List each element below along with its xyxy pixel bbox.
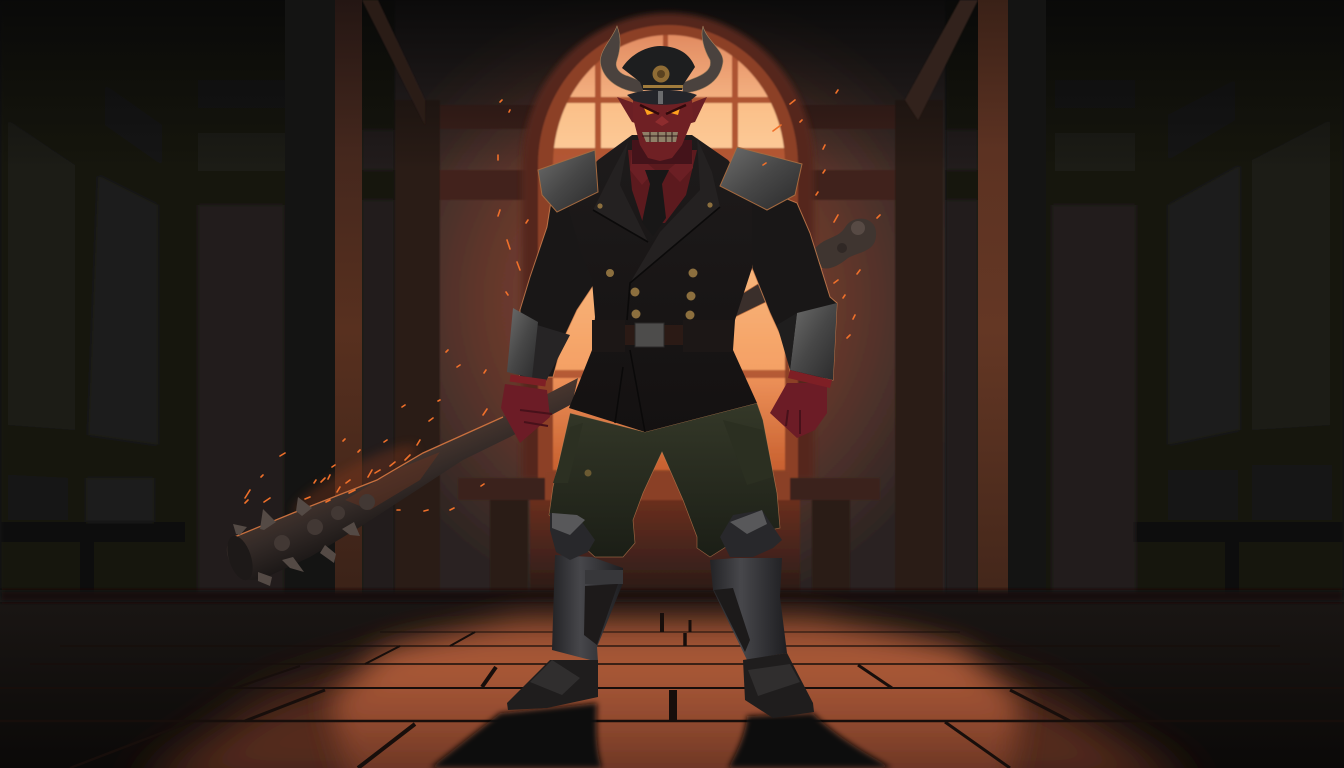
right cargo pocket <box>723 420 773 485</box>
ears <box>617 97 642 125</box>
cap crown <box>622 46 695 90</box>
cap brim <box>627 90 697 105</box>
lapels <box>593 142 648 242</box>
club upper end behind body <box>733 219 876 318</box>
collar wings <box>630 150 655 185</box>
right horn <box>682 26 723 93</box>
neck <box>632 140 692 164</box>
left boot <box>507 660 598 710</box>
right side wall <box>945 0 1344 610</box>
right arm <box>740 180 837 380</box>
right boot <box>743 653 814 718</box>
arched window <box>522 13 814 480</box>
embers <box>245 90 880 511</box>
jacket skirt seams <box>615 350 645 432</box>
club <box>222 378 578 586</box>
belt buckle <box>635 323 664 347</box>
belt pouches <box>592 320 625 352</box>
right knee plate <box>720 510 782 557</box>
left horn <box>600 26 643 93</box>
body <box>501 135 837 443</box>
left arm <box>520 180 597 377</box>
diagonal roof braces <box>362 0 978 125</box>
pocket button <box>584 470 592 476</box>
left side wall <box>0 0 396 610</box>
floor <box>0 590 1344 768</box>
right greave <box>710 558 787 660</box>
right shoulder plate <box>720 147 802 210</box>
left greave <box>552 555 623 662</box>
belt <box>592 325 733 345</box>
legs <box>507 403 814 718</box>
head <box>600 26 723 164</box>
dim floor spill <box>130 645 1200 768</box>
window panes <box>553 33 785 470</box>
floor tile lines <box>0 613 1344 768</box>
trousers <box>549 403 780 557</box>
club spikes <box>233 497 360 586</box>
right column <box>978 0 1078 622</box>
right fist <box>770 383 827 438</box>
left hand <box>501 384 550 443</box>
left column <box>262 0 362 622</box>
club shaft and head <box>227 378 578 580</box>
leg shadows <box>430 703 602 768</box>
club studs <box>274 494 375 551</box>
floor light <box>330 616 1020 768</box>
ember glow over club <box>287 435 423 525</box>
left shoulder plate <box>538 150 598 212</box>
eyes <box>644 108 658 115</box>
left bracer <box>520 313 570 383</box>
left knee plate <box>550 513 595 560</box>
back wall <box>395 0 945 600</box>
right bracer <box>790 303 837 380</box>
face <box>633 100 693 161</box>
torso jacket <box>565 135 757 432</box>
shirt <box>628 150 697 223</box>
cap badge <box>652 66 670 82</box>
top darkening <box>0 0 1344 170</box>
brow <box>640 105 686 114</box>
teeth <box>642 132 678 142</box>
tie <box>642 170 669 236</box>
left cargo pocket <box>553 423 583 483</box>
cap band <box>643 85 683 88</box>
nose <box>655 116 669 126</box>
buttons <box>597 202 713 320</box>
altar table behind legs <box>458 472 880 598</box>
